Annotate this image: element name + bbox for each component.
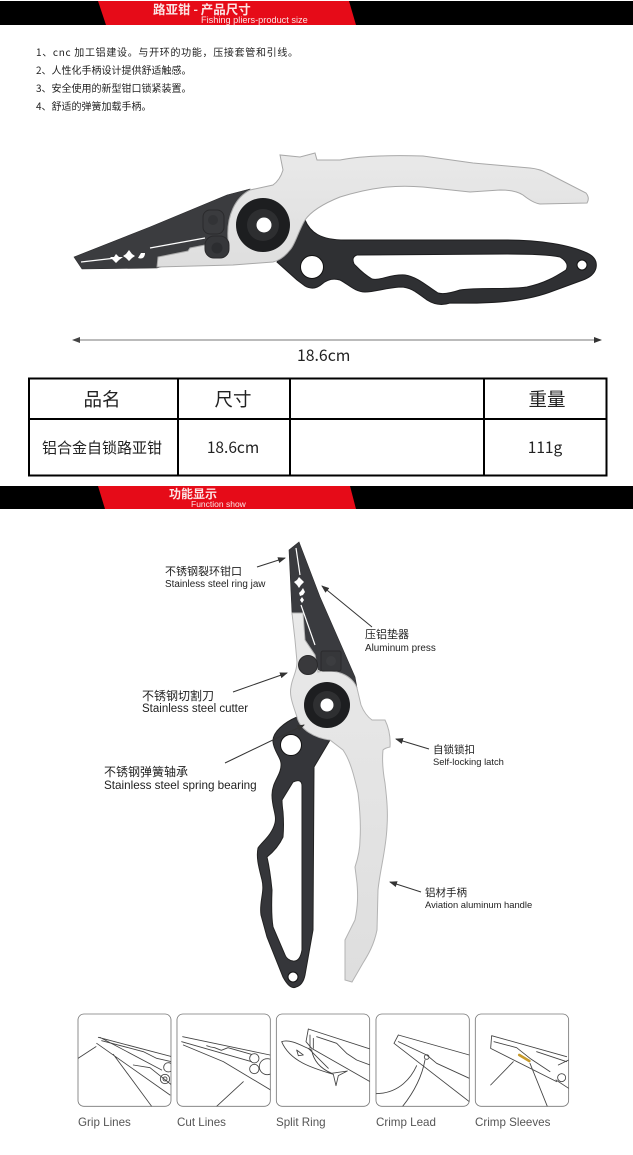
- silver handle: [157, 153, 588, 267]
- thumbnail labels: Grip Lines: [78, 1116, 131, 1129]
- callout: latch: Self-locking latch: [433, 756, 504, 767]
- jaw slot: [296, 548, 315, 645]
- thumbnail labels: Crimp Sleeves: [475, 1116, 551, 1129]
- vertical pliers photo: [257, 542, 390, 988]
- callout: cutter: Stainless steel cutter: [142, 703, 248, 715]
- callout: latch: 自锁锁扣: [433, 742, 475, 757]
- feature list: [36, 44, 298, 113]
- crimp sleeves: [475, 1014, 569, 1106]
- lower black handle: [277, 220, 596, 304]
- cut lines: [177, 1014, 275, 1106]
- banner: product size: [0, 0, 633, 25]
- crimp lead: [376, 1014, 469, 1106]
- banner: function show: [0, 485, 633, 509]
- bolts: [298, 656, 318, 674]
- callout: cutter: [142, 673, 287, 715]
- banner: function show: 功能显示: [169, 485, 217, 502]
- spec table: [29, 378, 607, 476]
- thumbnail labels: [78, 1116, 551, 1129]
- handle holes: [280, 734, 302, 756]
- callout: spring bearing: 不锈钢弹簧轴承: [104, 763, 188, 780]
- callout: aluminum press: 压铝垫器: [365, 626, 409, 642]
- banner: function show: Function show: [191, 499, 247, 509]
- thumbnail labels: Split Ring: [276, 1116, 326, 1129]
- spec table: 尺寸: [214, 386, 252, 412]
- thumbnails: split ring, crimp lead, crimp sleeves: [276, 1014, 569, 1106]
- dimension label: 18.6cm: [297, 343, 350, 366]
- spec table: 铝合金自锁路亚钳: [42, 437, 162, 458]
- spec table: 重量: [528, 386, 566, 412]
- callout: cutter: 不锈钢切割刀: [142, 687, 214, 704]
- callout: handle: [390, 882, 532, 910]
- horizontal pliers photo: [74, 153, 596, 304]
- feature list: 1、cnc 加工铝建设。与开环的功能，压接套管和引线。: [36, 44, 298, 59]
- dimension arrow: [73, 339, 601, 341]
- handle holes: [300, 256, 324, 278]
- grip lines: [78, 1014, 173, 1106]
- callout: spring bearing: Stainless steel spring bearing: [104, 779, 257, 792]
- feature list: 2、人性化手柄设计提供舒适触感。: [36, 62, 192, 77]
- black jaw: [74, 189, 250, 269]
- pivot screw: [304, 682, 350, 728]
- jaw slot: [81, 238, 205, 262]
- callout: aluminum press: Aluminum press: [365, 643, 436, 654]
- bolts: [203, 210, 224, 234]
- split ring: [276, 1014, 370, 1106]
- thumbnail labels: Crimp Lead: [376, 1116, 436, 1129]
- callout: aluminum press: [322, 586, 436, 654]
- callout: handle: 铝材手柄: [425, 885, 467, 900]
- spec table: 品名: [83, 386, 121, 412]
- banner: product size: Fishing pliers-product size: [201, 15, 308, 25]
- callout: handle: Aviation aluminum handle: [425, 899, 532, 910]
- black jaw: [289, 542, 357, 688]
- silver handle: [290, 613, 390, 982]
- thumbnails: grip, cut: [78, 1014, 275, 1106]
- spec table: 111g: [528, 436, 563, 458]
- callout: ring jaw: Stainless steel ring jaw: [165, 579, 266, 590]
- callout: spring bearing: [104, 725, 304, 792]
- black handle: [257, 717, 330, 988]
- feature list: 4、舒适的弹簧加载手柄。: [36, 98, 152, 113]
- spec table: 18.6cm: [207, 436, 259, 458]
- feature list: 3、安全使用的新型钳口锁紧装置。: [36, 80, 192, 95]
- callout: ring jaw: 不锈钢裂环钳口: [165, 563, 242, 579]
- thumbnail labels: Cut Lines: [177, 1116, 226, 1129]
- callout: ring jaw: [165, 558, 285, 590]
- pivot screw: [236, 198, 290, 252]
- callout: latch: [396, 739, 504, 767]
